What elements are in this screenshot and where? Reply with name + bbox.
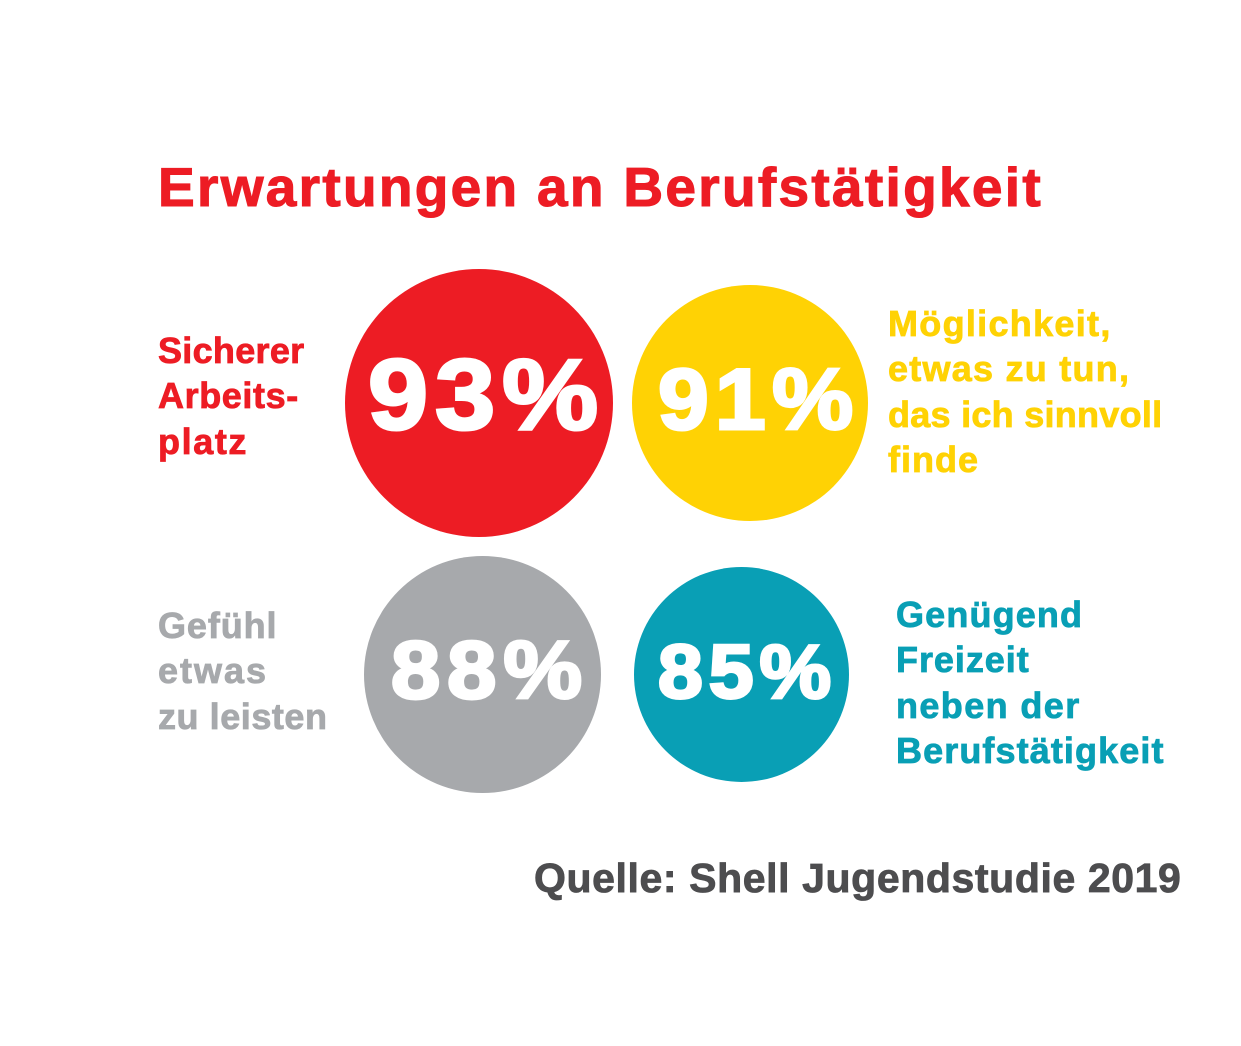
value: 91%: 91% [658,352,860,448]
label: Möglichkeit [888,303,1162,480]
label: Genügend Freizeit [896,594,1165,771]
label: Genügend Freizeit: Berufstätigkeit [896,730,1165,771]
panel: 88% circle [364,556,601,793]
label: Sicherer Arbeitsplatz: Arbeits- [158,375,299,416]
panel: 85% circle [634,567,849,782]
label: Gefühl etwas zu leisten: etwas [158,650,268,691]
label: Sicherer Arbeitsplatz [158,330,304,462]
label: Gefühl etwas zu leisten: Gefühl [158,605,277,646]
label: Möglichkeit: etwas zu tun, [888,348,1130,389]
label: Genügend Freizeit: Freizeit [896,639,1030,680]
label: Gefühl etwas zu leisten [158,605,328,737]
label: Genügend Freizeit: neben der [896,685,1081,726]
label: Möglichkeit: Möglichkeit, [888,303,1112,344]
title: Erwartungen an Berufstätigkeit [158,156,1043,218]
value: 93%: 93% [368,339,605,451]
label: Möglichkeit: das ich sinnvoll [888,394,1162,435]
value: 88%: 88% [391,625,589,716]
panel: 93% circle [345,269,613,537]
label: Möglichkeit: finde [888,439,979,480]
label: Sicherer Arbeitsplatz: Sicherer [158,330,304,371]
label: Genügend Freizeit: Genügend [896,594,1083,635]
panel: 91% circle [632,285,868,521]
source: Quelle: Shell Jugendstudie 2019 [534,855,1181,901]
value: 85%: 85% [658,630,837,715]
label: Sicherer Arbeitsplatz: platz [158,421,248,462]
label: Gefühl etwas zu leisten: zu leisten [158,696,328,737]
